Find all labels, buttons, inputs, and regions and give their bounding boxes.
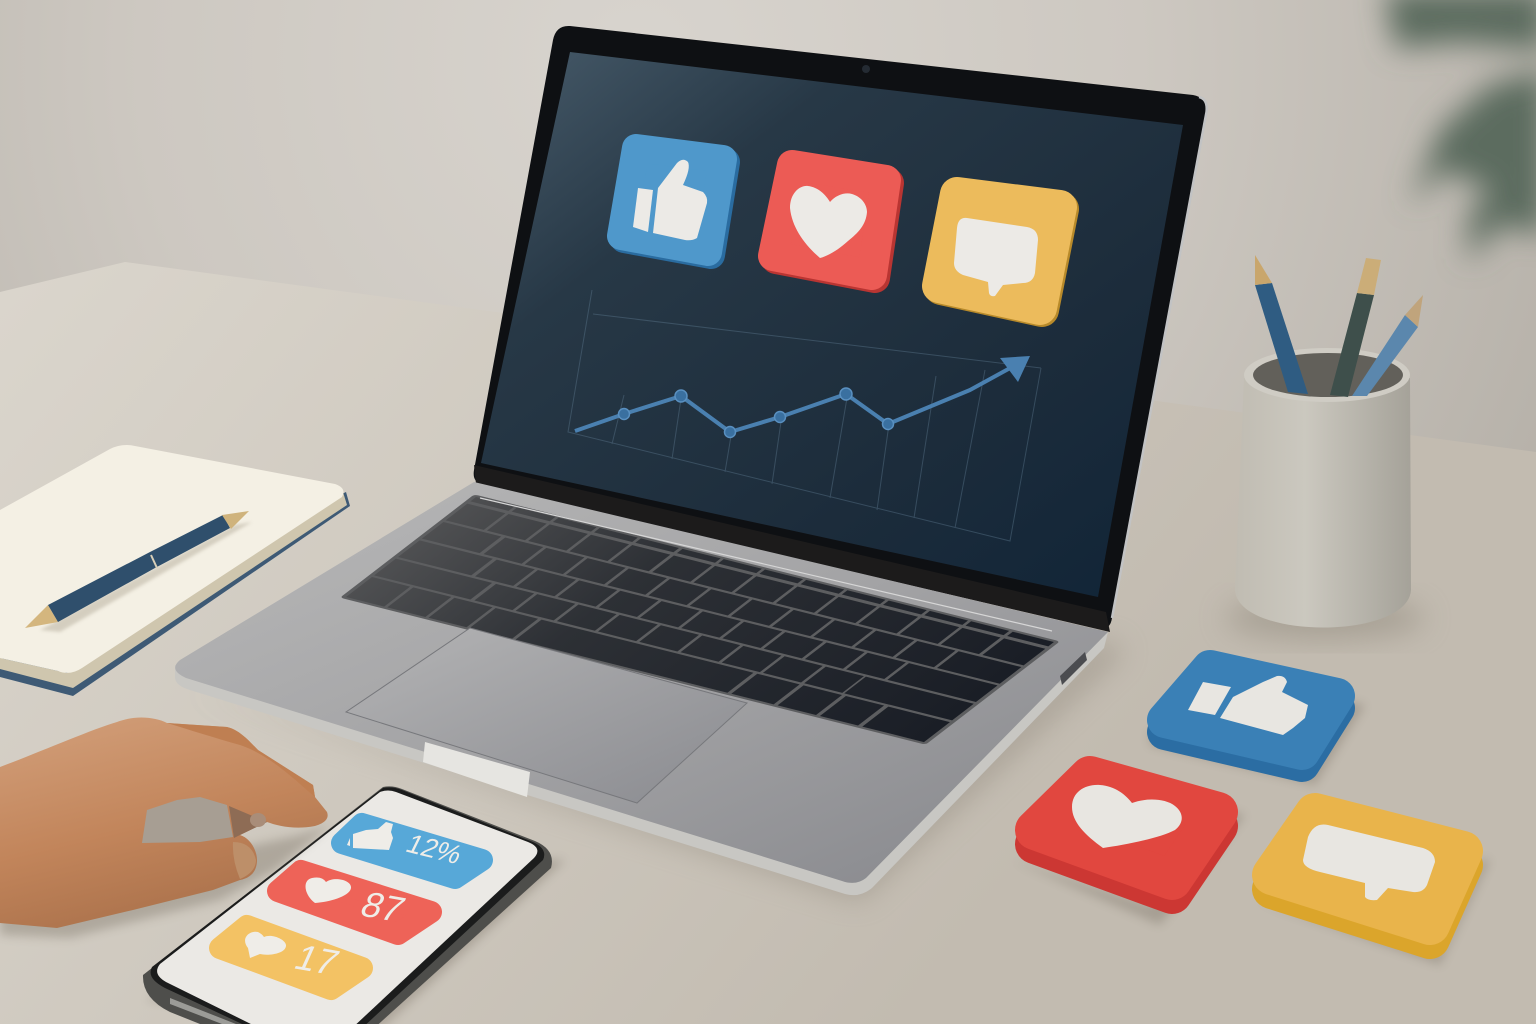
pill: likes <box>342 822 482 878</box>
tile face <box>1035 776 1218 880</box>
screen icon: like <box>621 148 726 255</box>
hand <box>0 718 330 938</box>
tile shadow <box>1150 700 1365 785</box>
line chart <box>568 290 1041 541</box>
pill: hearts <box>278 871 431 934</box>
tile shadow <box>1255 860 1490 965</box>
base front edge <box>175 632 1108 895</box>
pen <box>25 511 252 632</box>
tile: like <box>1150 668 1365 785</box>
tile body <box>1035 790 1218 894</box>
cup body <box>1235 378 1411 628</box>
back finger <box>167 723 315 797</box>
front notch <box>423 742 530 797</box>
cup rim <box>1244 348 1410 402</box>
palm and fingers <box>0 718 328 928</box>
screen icon: heart <box>773 165 889 278</box>
tile body <box>1165 680 1337 764</box>
tile body <box>1272 827 1463 939</box>
lid and screen <box>474 26 1207 632</box>
side port <box>1060 652 1087 685</box>
notebook page edge <box>0 492 347 688</box>
hinge band <box>474 465 1110 632</box>
pill heart <box>306 878 351 903</box>
webcam <box>862 65 870 73</box>
phone screen <box>157 790 537 1024</box>
pill count: 87 <box>355 884 411 929</box>
pill count: 17 <box>289 937 345 982</box>
cup shadow <box>1225 596 1425 640</box>
lid bezel <box>474 26 1206 629</box>
pencils <box>1255 255 1423 397</box>
phone body <box>143 786 552 1024</box>
phone lower edge highlight <box>170 998 236 1024</box>
tile thumb <box>1188 676 1308 735</box>
phone <box>143 786 565 1024</box>
phone shadow <box>145 860 565 1024</box>
notebook page <box>0 445 343 673</box>
blurred plant <box>1385 0 1536 262</box>
tile shadow <box>1012 810 1245 925</box>
desk surface <box>0 262 1536 1024</box>
hand shadow <box>0 825 330 938</box>
thumb nail <box>233 842 256 879</box>
tile bubble <box>1303 824 1435 900</box>
pill count: 12% <box>401 828 468 870</box>
tile: comment <box>1255 813 1490 965</box>
gap between fingers and thumb <box>142 797 233 843</box>
keyboard <box>340 494 1060 745</box>
tile face <box>1165 668 1337 752</box>
screen icon: comment <box>939 194 1062 310</box>
tile heart shape <box>1072 785 1182 848</box>
trackpad <box>346 628 747 803</box>
tile face <box>1272 813 1463 925</box>
laptop base <box>175 482 1108 895</box>
pencil cup with pencils <box>1225 255 1425 640</box>
pill: comments <box>220 926 362 989</box>
laptop <box>175 26 1207 900</box>
pill thumb <box>347 822 393 850</box>
notebook cover <box>0 492 350 696</box>
pill bubble heart <box>245 932 286 958</box>
laptop shadow <box>190 640 1125 900</box>
base top deck <box>175 482 1108 883</box>
tile: heart <box>1012 776 1245 925</box>
display <box>481 52 1183 597</box>
shadow under finger <box>229 806 267 838</box>
notebook with pen <box>0 445 350 696</box>
